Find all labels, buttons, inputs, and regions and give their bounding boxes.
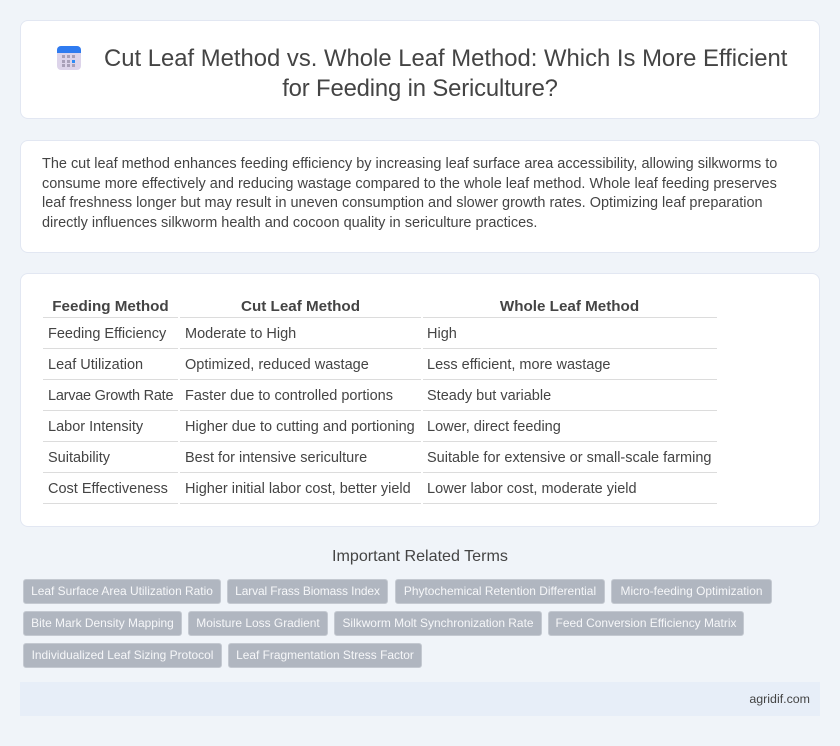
- row: larvae growth rate: Steady but variable: [427, 388, 551, 404]
- row: feeding efficiency: Feeding Efficiency: [48, 326, 166, 342]
- row: cost effectiveness: Lower labor cost, moderate yield: [427, 481, 637, 497]
- related terms tags: Bite Mark Density Mapping: [31, 616, 174, 630]
- related terms tags: Micro-feeding Optimization: [620, 584, 762, 598]
- table: [43, 298, 717, 504]
- title: [104, 45, 788, 102]
- summary text: leaf freshness longer but may result in uneven consumption and slower growth rates. Optimizing leaf preparation: [42, 195, 763, 211]
- related terms tags: [23, 579, 772, 668]
- title: Cut Leaf Method vs. Whole Leaf Method: Which Is More Efficient: [104, 45, 787, 72]
- row: suitability: Suitable for extensive or small-scale farming: [427, 450, 711, 466]
- icon: calendar: [57, 46, 81, 70]
- row: feeding efficiency: [48, 326, 457, 342]
- row: leaf utilization: Less efficient, more wastage: [427, 357, 610, 373]
- title: for Feeding in Sericulture?: [282, 75, 558, 102]
- row: feeding efficiency: Moderate to High: [185, 326, 296, 342]
- summary text: The cut leaf method enhances feeding efficiency by increasing leaf surface area accessibility, allowing silkworms to: [42, 156, 777, 172]
- summary panel: [20, 140, 820, 253]
- related terms tags: Larval Frass Biomass Index: [235, 584, 380, 598]
- row: feeding efficiency: High: [427, 326, 457, 342]
- row: labor intensity: [48, 419, 561, 435]
- row: leaf utilization: [48, 357, 610, 373]
- row: suitability: Best for intensive sericulture: [185, 450, 367, 466]
- row: leaf utilization: Optimized, reduced wastage: [185, 357, 369, 373]
- summary text: [42, 156, 777, 231]
- summary text: consume more effectively and reducing wastage compared to the whole leaf method. Whole leaf feeding preserves: [42, 176, 777, 192]
- title panel: [20, 20, 820, 119]
- table header: Whole Leaf Method: [500, 298, 639, 315]
- related terms heading: Important Related Terms: [332, 547, 508, 565]
- comparison table panel: [20, 273, 820, 527]
- related terms tags: Feed Conversion Efficiency Matrix: [556, 616, 736, 630]
- related terms tags: Leaf Surface Area Utilization Ratio: [31, 584, 213, 598]
- row: larvae growth rate: [48, 388, 551, 404]
- related terms tags: Moisture Loss Gradient: [196, 616, 320, 630]
- row: cost effectiveness: Higher initial labor cost, better yield: [185, 481, 411, 497]
- row: suitability: [48, 450, 711, 466]
- row: cost effectiveness: [48, 481, 637, 497]
- related terms tags: Individualized Leaf Sizing Protocol: [32, 648, 213, 662]
- footer source: agridif.com: [749, 692, 810, 706]
- row: leaf utilization: Leaf Utilization: [48, 357, 143, 373]
- related terms tags: Silkworm Molt Synchronization Rate: [342, 616, 534, 630]
- row: larvae growth rate: Faster due to controlled portions: [185, 388, 393, 404]
- related terms tags: Phytochemical Retention Differential: [404, 584, 596, 598]
- row: larvae growth rate: Larvae Growth Rate: [48, 388, 173, 404]
- footer bar: [20, 682, 820, 716]
- related terms tags: Leaf Fragmentation Stress Factor: [236, 648, 414, 662]
- row: labor intensity: Labor Intensity: [48, 419, 143, 435]
- row: labor intensity: Higher due to cutting and portioning: [185, 419, 415, 435]
- table header: [52, 298, 639, 315]
- summary text: directly influences silkworm health and cocoon quality in sericulture practices.: [42, 215, 537, 231]
- row: labor intensity: Lower, direct feeding: [427, 419, 561, 435]
- row: cost effectiveness: Cost Effectiveness: [48, 481, 168, 497]
- table header: Feeding Method: [52, 298, 169, 315]
- table header: Cut Leaf Method: [241, 298, 360, 315]
- row: suitability: Suitability: [48, 450, 110, 466]
